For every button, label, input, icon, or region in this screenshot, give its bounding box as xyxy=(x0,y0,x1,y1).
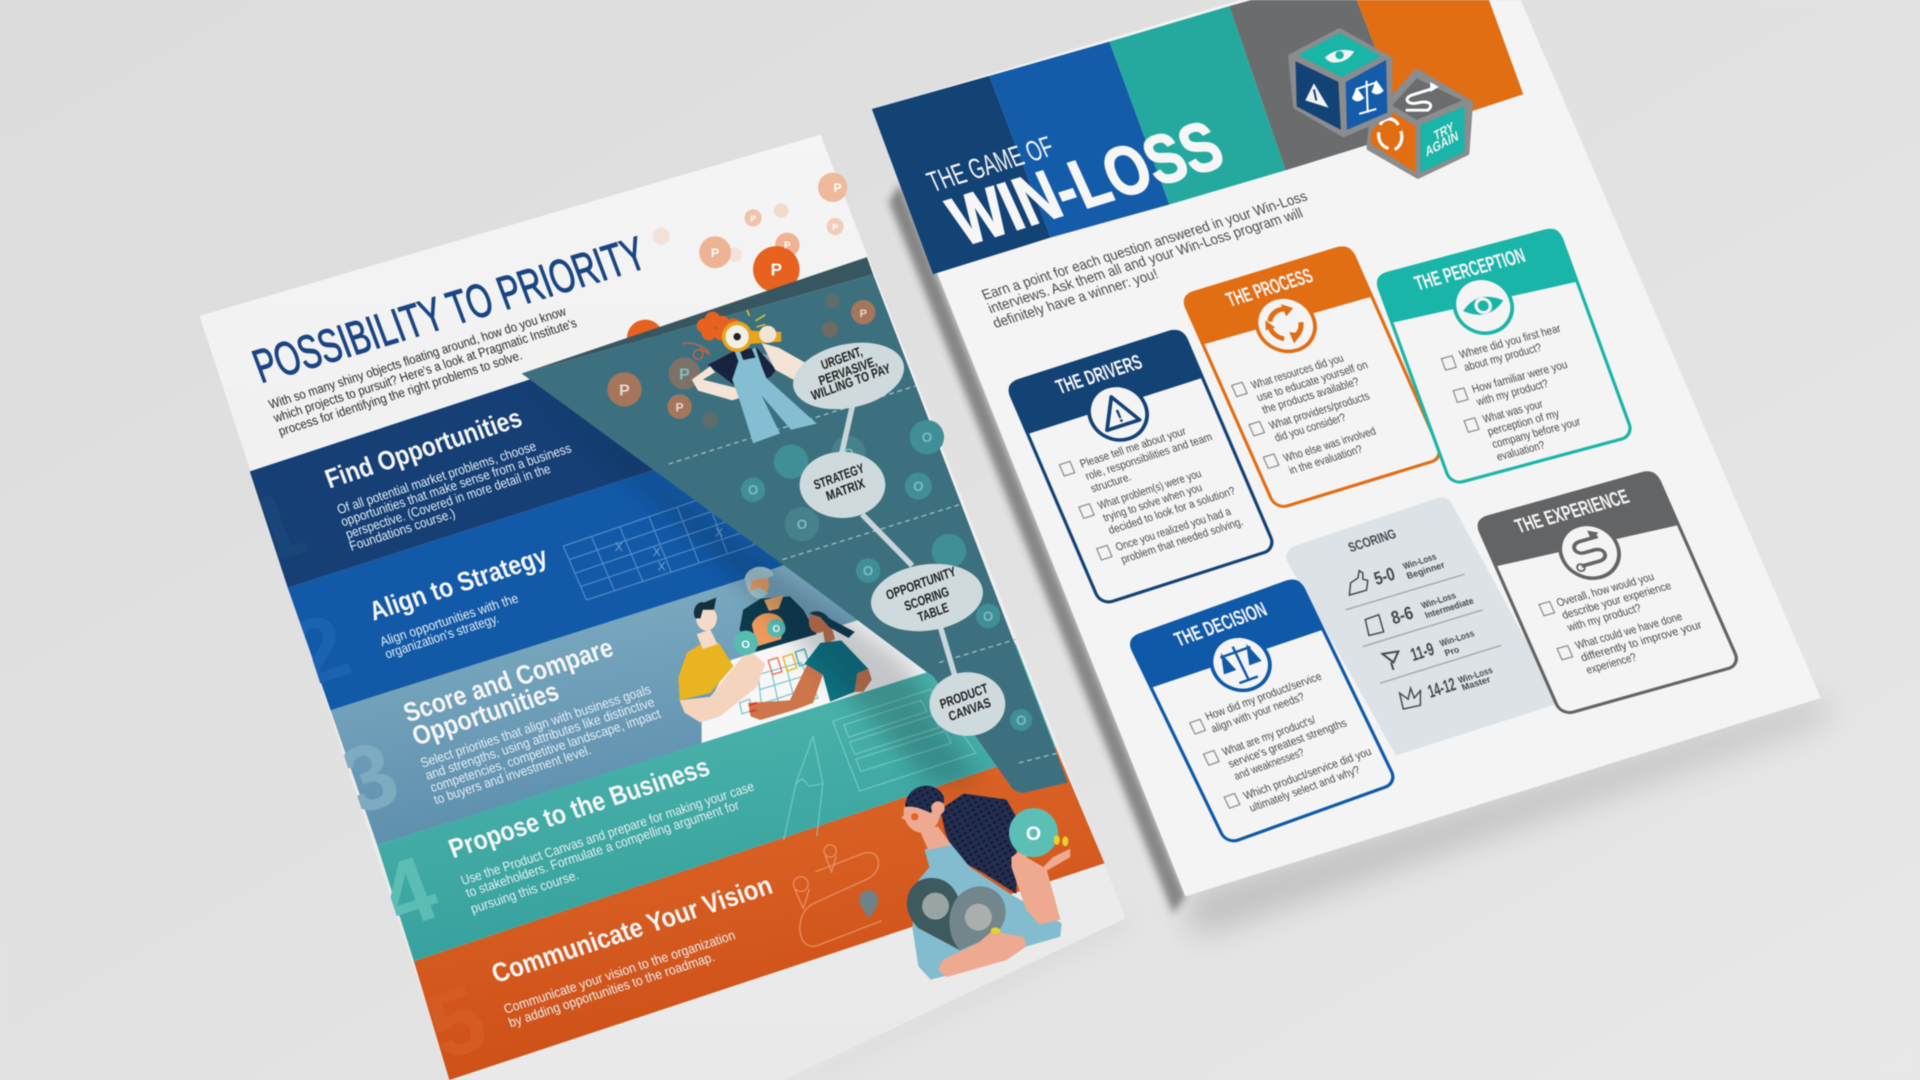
questions: Which product/service did you xyxy=(1242,746,1374,802)
questions: Once you realized you had a xyxy=(1114,506,1233,554)
questions: ultimately select and why? xyxy=(1248,764,1362,815)
illustration: person with magnifying glass xyxy=(682,310,817,443)
questions: How familiar were you xyxy=(1470,359,1569,396)
numeral 4: 4 xyxy=(365,836,451,949)
icon: warning: ! xyxy=(1112,405,1126,426)
questions: problem that needed solving. xyxy=(1119,516,1245,566)
arms xyxy=(692,366,740,400)
row: intermediate: 8-6 xyxy=(1388,602,1416,628)
questions xyxy=(1440,323,1600,468)
score table xyxy=(740,662,818,716)
row: pro xyxy=(1382,628,1476,670)
band 4: propose to the business xyxy=(365,645,1056,961)
sight beam xyxy=(744,349,806,380)
card title: THE DRIVERS xyxy=(1053,351,1146,399)
heading: win-loss: WIN-LOSS xyxy=(938,107,1235,261)
body text: to stakeholders. Formulate a compelling argument for xyxy=(464,797,742,900)
man in dark shirt xyxy=(740,596,817,651)
tokens inside funnel xyxy=(607,294,1032,731)
questions: structure. xyxy=(1089,472,1133,495)
title: POSSIBILITY TO PRIORITY xyxy=(246,228,653,394)
card title: THE DECISION xyxy=(1171,598,1271,651)
questions: perception of my xyxy=(1486,408,1561,438)
card title: THE EXPERIENCE xyxy=(1512,485,1633,538)
chart: strategy matrix grid: X xyxy=(658,560,666,574)
questions: in the evaluation? xyxy=(1287,444,1365,477)
questions: What was your xyxy=(1481,398,1545,426)
tokens inside funnel: O xyxy=(983,609,993,624)
floating P tokens: P xyxy=(750,214,756,224)
card: the perception xyxy=(1373,226,1635,485)
illustration: team scoring opportunities: O xyxy=(773,624,781,635)
illustration: team scoring opportunities xyxy=(678,567,927,759)
lower arm xyxy=(938,928,1026,977)
intro text: which projects to pursuit? Here's a look at Pragmatic Institute's xyxy=(270,315,579,426)
floating P tokens: P xyxy=(771,260,782,280)
floating P tokens xyxy=(627,173,847,356)
right arm xyxy=(1011,845,1070,924)
icon: eye xyxy=(1446,272,1520,340)
scoring heading: SCORING xyxy=(1346,526,1398,555)
rays xyxy=(747,310,765,327)
questions: What could we have done xyxy=(1574,611,1684,652)
magnifying glass xyxy=(748,331,781,344)
intro text: process for identifying the right problems to solve. xyxy=(276,348,524,439)
row: pro: Win-Loss xyxy=(1438,628,1476,648)
questions: differently to improve your xyxy=(1579,620,1704,664)
numeral 3: 3 xyxy=(326,721,411,834)
row: pro: 11-9 xyxy=(1408,638,1436,665)
body text: Align opportunities with the xyxy=(378,590,521,649)
body text: and strengths, using attributes like distinctive xyxy=(423,694,657,783)
callout: product canvas: CANVAS xyxy=(947,695,993,724)
hair xyxy=(697,312,741,340)
questions: about my product? xyxy=(1462,342,1543,374)
body text: Foundations course.) xyxy=(347,506,457,554)
intro text: Earn a point for each question answered in your Win-Loss xyxy=(980,189,1310,304)
questions: align with your needs? xyxy=(1209,691,1307,735)
page: the game of win-loss xyxy=(872,0,1821,896)
body text: Communicate your vision to the organization xyxy=(502,927,737,1017)
neck xyxy=(920,827,951,850)
callout: strategy matrix: MATRIX xyxy=(824,476,867,504)
callout: opportunity scoring table: SCORING xyxy=(903,584,951,614)
questions xyxy=(1059,418,1250,572)
body text: opportunities that make sense from a business xyxy=(339,440,574,529)
card: the process xyxy=(1180,244,1444,510)
row: intermediate: Win-Loss xyxy=(1420,590,1457,610)
body xyxy=(912,840,1062,980)
row: master: 14-12 xyxy=(1425,673,1458,702)
floating P tokens: P xyxy=(641,331,650,346)
card header xyxy=(1005,327,1204,434)
tokens inside funnel: O xyxy=(913,479,924,494)
questions: use to educate yourself on xyxy=(1255,359,1370,404)
card header xyxy=(1373,226,1578,331)
heading: the game of: THE GAME OF xyxy=(922,131,1059,199)
heading: Propose to the Business xyxy=(445,752,714,864)
intro text: With so many shiny objects floating around, how do you know xyxy=(266,303,569,412)
questions: Please tell me about your xyxy=(1078,426,1188,471)
questions: What resources did you xyxy=(1250,353,1346,392)
icon: small die: AGAIN xyxy=(1424,128,1459,160)
icon: pencil xyxy=(784,736,823,840)
page sheet xyxy=(200,135,1125,1080)
shirt xyxy=(708,348,776,386)
questions: and weaknesses? xyxy=(1232,747,1307,783)
heading: Find Opportunities xyxy=(321,403,526,494)
card: the decision xyxy=(1126,576,1398,845)
row: master xyxy=(1400,665,1494,709)
row: pro: Pro xyxy=(1443,644,1461,658)
heading: Score and Compare xyxy=(399,632,617,728)
funnel connectors xyxy=(841,407,956,681)
overalls xyxy=(732,348,817,443)
row: beginner: Beginner xyxy=(1405,560,1447,581)
squiggle xyxy=(682,343,709,359)
funnel xyxy=(522,274,1068,793)
questions: experience? xyxy=(1584,652,1639,677)
icon: warning xyxy=(1080,378,1156,447)
questions: with my product? xyxy=(1474,378,1550,409)
row: master: Master xyxy=(1460,674,1492,692)
teal token xyxy=(1009,808,1058,857)
numeral 2: 2 xyxy=(277,593,362,707)
illustration: team scoring opportunities: O xyxy=(741,639,750,651)
floating P tokens: P xyxy=(832,222,838,232)
icon: route xyxy=(1551,518,1628,585)
face xyxy=(904,791,940,833)
questions: the products available? xyxy=(1260,376,1361,416)
callout: strategy matrix xyxy=(800,452,885,518)
body text: Select priorities that align with business goals xyxy=(418,682,653,771)
chart: strategy matrix grid: X xyxy=(653,545,661,559)
tokens inside funnel: O xyxy=(797,517,807,532)
page: possibility to priority xyxy=(200,135,1129,1080)
numeral 5: 5 xyxy=(414,966,499,1079)
floating P tokens: P xyxy=(784,241,791,252)
tokens inside funnel: P xyxy=(860,308,867,320)
funnel dashed stage lines xyxy=(669,386,1058,763)
questions: evaluation? xyxy=(1495,440,1547,464)
card header xyxy=(1474,469,1680,576)
questions: Where did you first hear xyxy=(1458,323,1563,361)
icon: scales xyxy=(1202,628,1279,698)
row: beginner: Win-Loss xyxy=(1401,552,1438,571)
body text: perspective. (Covered in more detail in the xyxy=(344,461,553,542)
questions xyxy=(1537,565,1709,682)
questions: company before your xyxy=(1491,416,1582,451)
callout: opportunity scoring table: TABLE xyxy=(916,600,950,625)
funnel shadow xyxy=(522,373,980,784)
icon: large die xyxy=(1291,31,1390,135)
callout: urgent, pervasive, willing to pay: PERVASIVE, xyxy=(817,353,879,389)
questions: did you consider? xyxy=(1273,412,1348,444)
icon: small die xyxy=(1369,71,1471,176)
questions: describe your experience xyxy=(1560,580,1673,622)
illustration: woman holding tokens: O xyxy=(1026,823,1041,845)
body text: Of all potential market problems, choose xyxy=(335,439,538,517)
heading: Align to Strategy xyxy=(365,541,551,626)
questions: trying to solve when you xyxy=(1101,482,1204,525)
body text: organization's strategy. xyxy=(383,611,501,662)
intro text: interviews. Ask them all and your Win-Loss program will xyxy=(986,206,1306,317)
callout: urgent, pervasive, willing to pay: WILLING TO PAY xyxy=(809,361,892,403)
panel: scoring xyxy=(1286,497,1560,756)
page sheet xyxy=(872,0,1821,896)
questions xyxy=(1186,667,1379,821)
chart: strategy matrix grid: X xyxy=(715,525,723,539)
hair front xyxy=(905,786,944,813)
band 3: score and compare xyxy=(330,564,1017,846)
tokens inside funnel: P xyxy=(619,383,630,400)
man in yellow shirt xyxy=(678,643,733,700)
callout: urgent, pervasive, willing to pay: URGENT, xyxy=(819,344,864,373)
body text: pursuing this course. xyxy=(468,867,581,916)
page shadow: win-loss sheet xyxy=(889,184,1831,937)
band 2: align to strategy xyxy=(287,470,784,711)
body text: competencies, competitive landscape, impact xyxy=(428,706,663,795)
questions: How did my product/service xyxy=(1204,671,1324,723)
numeral 1: 1 xyxy=(233,471,318,584)
questions: Who else was involved xyxy=(1282,426,1378,465)
questions: What providers/products xyxy=(1267,391,1372,432)
icon: roadmap xyxy=(793,845,882,946)
row: intermediate xyxy=(1365,590,1475,636)
tokens inside funnel: O xyxy=(922,430,932,445)
hair back xyxy=(940,793,1016,894)
questions: decided to look for a solution? xyxy=(1107,485,1237,537)
card: the drivers xyxy=(1005,327,1277,605)
card title: THE PROCESS xyxy=(1223,265,1317,311)
questions: with my product? xyxy=(1565,603,1643,634)
body text: by adding opportunities to the roadmap. xyxy=(506,949,717,1030)
page shadow xyxy=(796,912,1129,1080)
heading: Communicate Your Vision xyxy=(488,870,776,989)
callout: product canvas xyxy=(929,672,1005,736)
card title: THE PERCEPTION xyxy=(1412,244,1528,295)
row: beginner: 5-0 xyxy=(1371,563,1397,589)
chart: strategy matrix grid: X xyxy=(615,540,623,554)
band 1: find opportunities xyxy=(249,378,654,588)
white score sheet xyxy=(702,620,927,759)
icon: map pin xyxy=(859,890,878,918)
band 5: communicate your vision xyxy=(414,747,1104,1080)
callout: strategy matrix: STRATEGY xyxy=(812,460,866,493)
callout: product canvas: PRODUCT xyxy=(938,680,990,712)
questions: What problem(s) were you xyxy=(1096,468,1203,512)
questions: What are my product's/ xyxy=(1221,714,1318,758)
callout: opportunity scoring table: OPPORTUNITY xyxy=(884,564,958,603)
floating P tokens: P xyxy=(711,246,719,260)
tokens inside funnel: P xyxy=(679,367,690,384)
icon: canvas sheet xyxy=(833,689,976,791)
row: beginner xyxy=(1349,552,1447,595)
card: the experience xyxy=(1474,469,1741,716)
tokens inside funnel: O xyxy=(863,564,873,579)
body text: to buyers and investment level. xyxy=(432,742,593,807)
illustration: woman holding tokens xyxy=(901,786,1070,980)
heading xyxy=(399,632,617,751)
icon: small die: TRY xyxy=(1433,119,1455,144)
tokens inside funnel: O xyxy=(748,483,758,498)
tokens inside funnel: O xyxy=(843,446,854,461)
header stripes xyxy=(872,0,1523,274)
body text: Use the Product Canvas and prepare for making your case xyxy=(459,779,756,888)
callout: urgent, pervasive, willing to pay xyxy=(787,333,910,419)
icon: cycle xyxy=(1247,290,1324,358)
card header xyxy=(1180,244,1373,348)
chart: strategy matrix grid xyxy=(563,487,754,600)
questions: Overall, how would you xyxy=(1555,571,1656,609)
row: master: Win-Loss xyxy=(1456,665,1494,685)
questions xyxy=(1232,346,1402,482)
woman in teal shirt xyxy=(823,622,835,644)
funnel back lip xyxy=(522,257,873,373)
questions: role, responsibilities and team xyxy=(1084,431,1214,483)
tokens inside funnel: O xyxy=(1016,713,1026,728)
intro text: definitely have a winner: you! xyxy=(991,267,1161,332)
callout: opportunity scoring table xyxy=(867,557,987,638)
tokens inside funnel: P xyxy=(676,400,684,414)
card header xyxy=(1126,576,1324,691)
floating P tokens: P xyxy=(833,181,842,195)
heading: Opportunities xyxy=(408,676,563,751)
row: intermediate: Intermediate xyxy=(1423,596,1475,620)
questions: service's greatest strengths xyxy=(1226,717,1349,771)
map pins held xyxy=(907,878,962,950)
